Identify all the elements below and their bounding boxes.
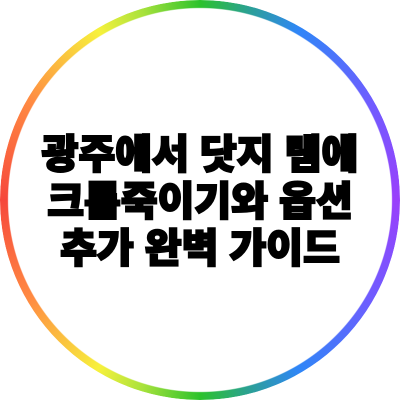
title: 광주에서 닷지 램에	[42, 133, 358, 177]
title: 추가 완벽 가이드	[60, 227, 340, 271]
title: 크롬죽이기와 옵션	[47, 180, 353, 224]
title	[41, 133, 358, 271]
